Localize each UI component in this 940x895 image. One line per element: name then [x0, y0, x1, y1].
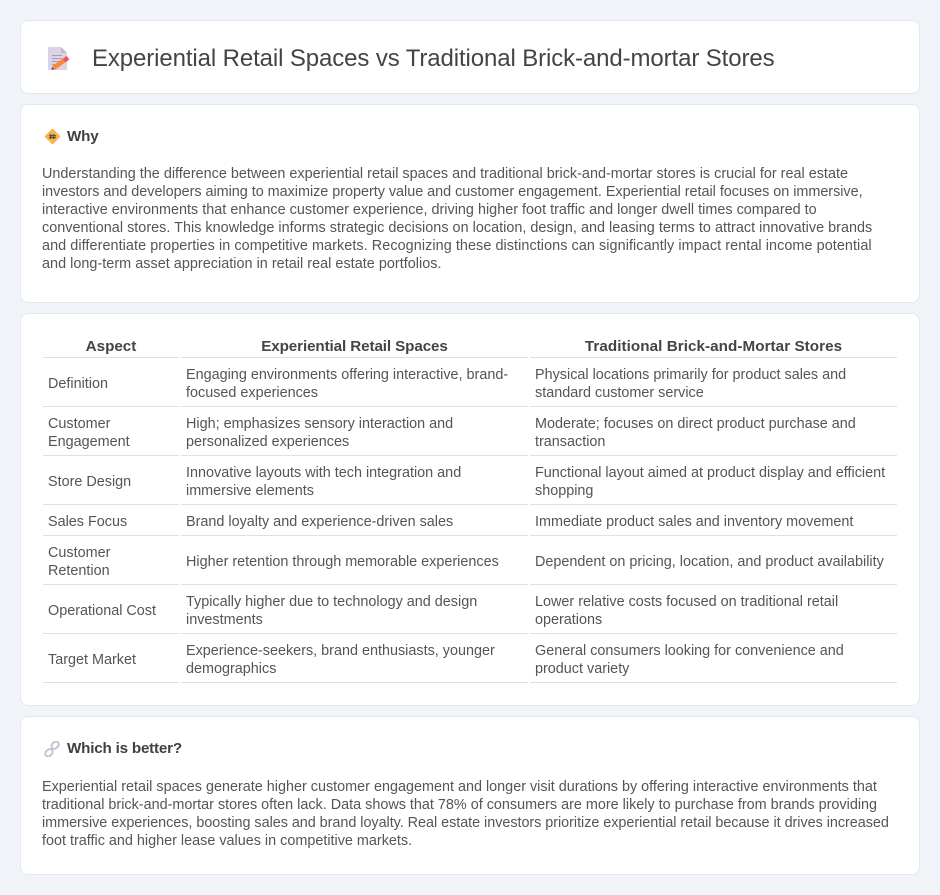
row: store design: immersive elements	[186, 483, 314, 499]
row: target market: Target Market	[48, 652, 136, 668]
row: operational cost: Operational Cost	[48, 603, 156, 619]
text block: why body: and long-term asset appreciation in retail real estate portfolios.	[42, 256, 442, 272]
text block: why body: Understanding the difference between experiential retail spaces and traditional brick-and-mortar stores is crucial for real estate	[42, 166, 848, 182]
table header row: Traditional Brick-and-Mortar Stores	[585, 338, 842, 355]
row: customer retention: Higher retention through memorable experiences	[186, 554, 499, 570]
row: target market	[43, 643, 897, 683]
row: definition: Engaging environments offering interactive, brand-	[186, 367, 508, 383]
text block: why body: and differentiate properties in competitive markets. Recognizing these distinctions can significantly impact rental income potential	[42, 238, 872, 254]
text block: why body: interactive environments that enhance customer experience, driving higher foot traffic and longer dwell times compared to	[42, 202, 817, 218]
row: store design: Store Design	[48, 474, 131, 490]
row: customer engagement: personalized experiences	[186, 434, 349, 450]
row: definition	[43, 367, 897, 407]
row: target market: product variety	[535, 661, 629, 677]
table header row: Aspect	[86, 338, 136, 355]
icon: warning diamond	[44, 128, 60, 144]
row: store design	[43, 465, 897, 505]
row: target market: General consumers looking for convenience and	[535, 643, 844, 659]
row: customer retention: Retention	[48, 563, 110, 579]
row: customer engagement: Moderate; focuses on direct product purchase and	[535, 416, 856, 432]
row: store design: Innovative layouts with tech integration and	[186, 465, 461, 481]
text block: why body	[42, 166, 872, 272]
text block: which is better body	[42, 779, 889, 849]
panel: comparison table	[20, 313, 920, 706]
row: definition: standard customer service	[535, 385, 704, 401]
row: sales focus: Brand loyalty and experience-driven sales	[186, 514, 453, 530]
row: sales focus: Sales Focus	[48, 514, 127, 530]
row: store design: shopping	[535, 483, 593, 499]
row: store design: Functional layout aimed at product display and efficient	[535, 465, 885, 481]
icon: document with pencil	[48, 47, 70, 70]
row: customer retention: Dependent on pricing, location, and product availability	[535, 554, 884, 570]
text block: why body: investors and developers aiming to maximize property value and customer engagement. Experiential retail focuses on immersive,	[42, 184, 863, 200]
row: customer engagement: Customer	[48, 416, 110, 432]
row: definition: Definition	[48, 376, 108, 392]
text block: which is better body: foot traffic and higher lease values in competitive markets.	[42, 833, 412, 849]
table header row: Experiential Retail Spaces	[261, 338, 448, 355]
row: customer engagement: transaction	[535, 434, 605, 450]
title: Experiential Retail Spaces vs Traditional Brick-and-mortar Stores	[92, 45, 774, 72]
row: customer engagement	[43, 416, 897, 456]
row: definition: focused experiences	[186, 385, 318, 401]
text block: why body: conventional stores. This knowledge informs strategic decisions on location, design, and leasing terms to attract innovative brands	[42, 220, 872, 236]
row: operational cost: investments	[186, 612, 263, 628]
row: target market: demographics	[186, 661, 276, 677]
row: customer engagement: Engagement	[48, 434, 130, 450]
table header row	[43, 338, 897, 683]
text block: which is better body: traditional brick-and-mortar stores often lack. Data shows that 78% of consumers are more likely to purchase from brands providing	[42, 797, 877, 813]
heading: which is better: Which is better?	[67, 740, 182, 757]
row: sales focus: Immediate product sales and inventory movement	[535, 514, 853, 530]
row: customer retention	[43, 545, 897, 585]
row: customer engagement: High; emphasizes sensory interaction and	[186, 416, 453, 432]
text block: which is better body: Experiential retail spaces generate higher customer engagement and longer visit durations by offering interactive environments that	[42, 779, 877, 795]
panel: why	[20, 104, 920, 303]
comparison table	[43, 338, 897, 683]
panel: title header	[20, 20, 920, 94]
panel: which is better	[20, 716, 920, 875]
row: sales focus	[43, 514, 897, 536]
row: customer retention: Customer	[48, 545, 110, 561]
row: operational cost: operations	[535, 612, 602, 628]
icon: link	[44, 741, 60, 757]
row: target market: Experience-seekers, brand enthusiasts, younger	[186, 643, 495, 659]
row: definition: Physical locations primarily for product sales and	[535, 367, 846, 383]
row: operational cost	[43, 594, 897, 634]
text block: which is better body: immersive experiences, boosting sales and brand loyalty. Real estate investors prioritize experiential retail because it drives increased	[42, 815, 889, 831]
row: operational cost: Lower relative costs focused on traditional retail	[535, 594, 838, 610]
row: operational cost: Typically higher due to technology and design	[186, 594, 477, 610]
heading: why: Why	[67, 128, 99, 145]
